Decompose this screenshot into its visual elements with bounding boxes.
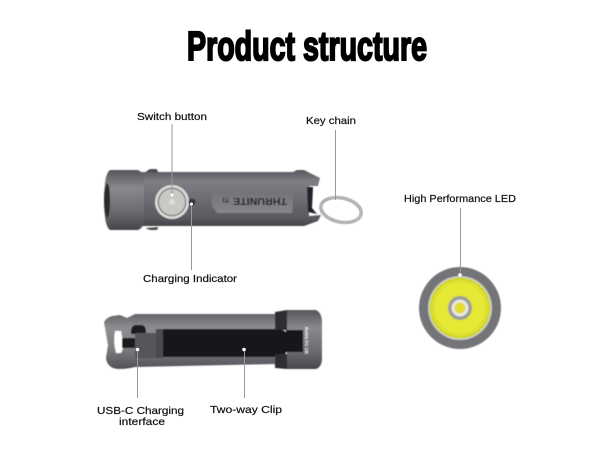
label: key chain	[306, 115, 356, 200]
icon: switch button	[155, 185, 189, 219]
side marking: RoHS FC CE	[304, 327, 309, 354]
label plate	[212, 192, 293, 213]
flashlight head	[287, 310, 322, 369]
icon: charging indicator	[188, 198, 196, 206]
brand text: THRUNITE	[233, 195, 287, 206]
label: high performance LED	[404, 193, 516, 277]
reflector	[430, 278, 490, 338]
icon: key ring	[318, 194, 364, 226]
title: Product structure	[187, 23, 427, 69]
key ring hole	[114, 331, 123, 353]
LED mount	[448, 296, 472, 320]
flashlight: front view with key ring	[104, 169, 364, 230]
label: key chain: Key chain	[306, 115, 356, 127]
label: USB-C charging interface: interface	[119, 416, 165, 428]
flashlight tail slot	[307, 187, 317, 214]
head ring	[275, 310, 287, 369]
reflector rim	[428, 276, 492, 340]
label: high performance LED: High Performance LED	[404, 193, 516, 205]
label: switch button: Switch button	[137, 111, 207, 123]
flashlight head	[104, 170, 144, 230]
label: USB-C charging interface: USB-C Charging	[97, 405, 184, 417]
label: two-way clip	[210, 348, 282, 416]
label: charging indicator: Charging Indicator	[143, 273, 238, 285]
USB tab	[122, 338, 135, 348]
flashlight lens	[104, 183, 110, 218]
flashlight body	[140, 170, 321, 226]
label: switch button	[137, 111, 207, 196]
LED emitter	[454, 302, 466, 314]
front view of LED head	[419, 267, 501, 349]
clip	[156, 329, 303, 358]
USB slot	[135, 333, 157, 358]
flashlight: back view with clip	[104, 310, 322, 369]
label: charging indicator	[143, 202, 238, 285]
label: USB-C charging interface	[97, 348, 184, 428]
USB cover	[131, 325, 146, 334]
side bumps	[146, 169, 158, 230]
brand text: T1	[221, 196, 229, 202]
outer bezel	[419, 267, 501, 349]
label: two-way clip: Two-way Clip	[210, 404, 282, 416]
flashlight body	[104, 314, 276, 369]
